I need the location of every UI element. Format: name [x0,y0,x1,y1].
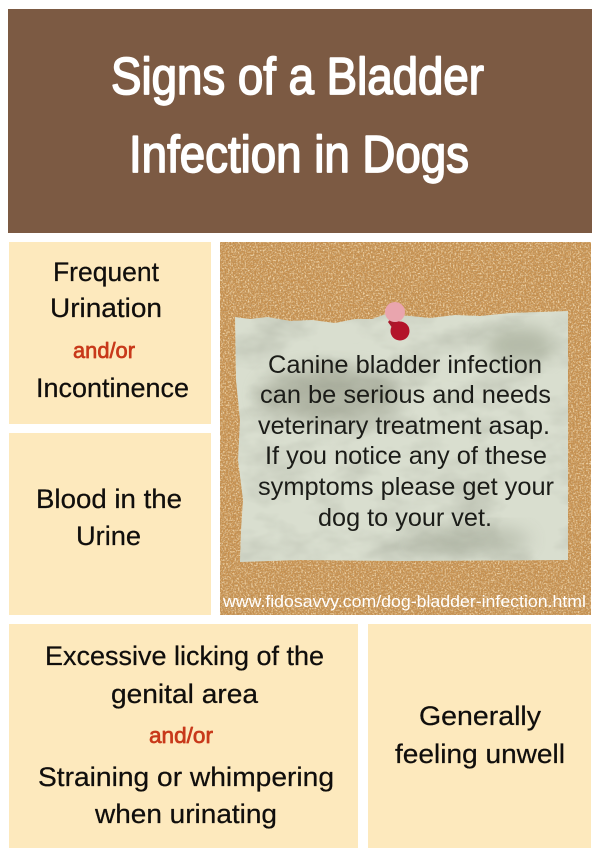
symptom: incontinence: Incontinence [36,373,189,403]
panel: frequent urination or incontinence [9,242,211,424]
connector: and/or: and/or [73,338,135,363]
icon: push pin [385,302,410,340]
panel: generally feeling unwell [368,624,591,848]
symptom: blood in the urine [36,484,182,551]
symptom: generally feeling unwell [395,701,565,769]
symptom: blood in the urine: Blood in the [36,484,182,514]
title text line 2: Infection in Dogs [129,126,469,184]
panel: corkboard note [220,242,591,615]
symptom: excessive licking [45,641,324,709]
torn paper note [234,310,570,563]
title text line 1: Signs of a Bladder [111,48,484,106]
note text: Canine bladder infection [268,351,542,379]
symptom: frequent urination: Frequent [53,257,159,287]
symptom: blood in the urine: Urine [76,521,141,551]
connector: and/or: and/or [149,723,213,748]
note text: symptoms please get your [258,473,554,501]
symptom: frequent urination [50,257,162,323]
note text: can be serious and needs [260,381,551,409]
symptom: generally feeling unwell: Generally [419,701,542,731]
symptom: excessive licking: Excessive licking of the [45,641,324,671]
title banner [8,9,592,233]
panel: blood in the urine [9,433,211,615]
note text: dog to your vet. [318,504,492,532]
symptom: frequent urination: Urination [50,293,162,323]
note text: If you notice any of these [265,442,547,470]
symptom: generally feeling unwell: feeling unwell [395,739,565,769]
note text: veterinary treatment asap. [258,412,550,440]
symptom: straining or whimpering: when urinating [94,799,277,829]
panel: excessive licking or straining [9,624,358,848]
note text [258,351,554,532]
symptom: straining or whimpering: Straining or whimpering [38,762,334,792]
symptom: excessive licking: genital area [111,679,259,709]
symptom: straining or whimpering [38,762,334,829]
source url: www.fidosavvy.com/dog-bladder-infection.html [222,592,586,611]
